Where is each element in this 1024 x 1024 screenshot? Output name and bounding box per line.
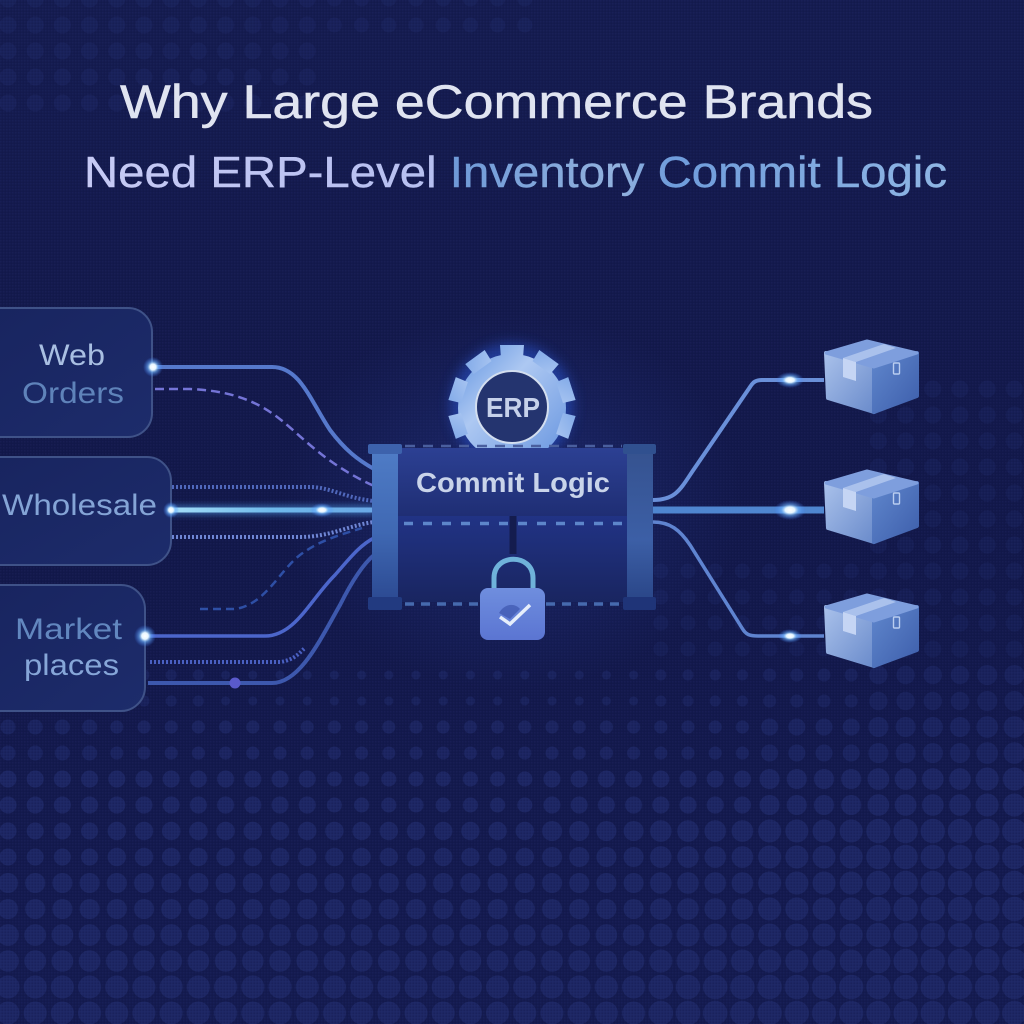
spark: wholesale — [163, 502, 179, 518]
panel: Marketplaces: Market — [15, 613, 123, 646]
line: faint dashed — [200, 528, 362, 609]
title line 1: Why Large eCommerce Brands — [120, 75, 873, 128]
icon: package bottom — [826, 595, 917, 666]
line: output middle — [653, 506, 824, 514]
line: marketplaces solid — [146, 538, 374, 636]
panel: Web Orders: Orders — [22, 377, 124, 410]
line: wholesale glow — [170, 505, 374, 515]
line: marketplaces lower — [148, 555, 374, 683]
panel: Web Orders — [0, 308, 152, 437]
incoming flow lines — [134, 357, 374, 688]
node: purple dot — [230, 678, 240, 688]
gear hub — [476, 371, 548, 443]
spark: output bottom — [778, 629, 802, 643]
icon: package top — [826, 341, 917, 412]
outgoing flow lines — [653, 372, 824, 643]
panel: commit logic gate — [368, 444, 656, 610]
lower dashed rail — [405, 602, 620, 606]
title line 2: Need ERP-Level Inventory Commit Logic — [84, 148, 947, 197]
spark: marketplaces — [134, 625, 156, 647]
line: marketplaces dotted — [150, 648, 305, 662]
icon: package middle — [826, 471, 917, 542]
top dashed rail — [405, 445, 622, 447]
line: wholesale dotted top — [172, 487, 374, 501]
line: output bottom — [653, 522, 824, 636]
right post — [623, 444, 656, 610]
panel: Marketplaces: places — [24, 649, 119, 682]
gear teeth and body — [448, 345, 576, 462]
panel: Wholesale — [0, 457, 171, 565]
spark: output top — [776, 372, 804, 388]
line: output top — [653, 380, 824, 500]
left post — [368, 444, 402, 610]
spark: output middle — [774, 500, 806, 520]
line: web orders solid — [153, 367, 374, 469]
spark: web orders — [143, 357, 163, 377]
spark: wholesale middle — [310, 503, 334, 517]
line: wholesale solid — [170, 508, 374, 512]
middle dashed rail — [404, 522, 625, 525]
icon: ERP gear: ERP — [486, 392, 540, 423]
panel: Wholesale: Wholesale — [2, 489, 157, 522]
gate body — [398, 516, 627, 602]
line: web orders dashed — [155, 389, 374, 486]
icon: padlock — [480, 559, 545, 640]
icon: ERP gear — [448, 343, 576, 467]
vertical connector — [510, 516, 516, 554]
title — [84, 75, 947, 197]
line: wholesale dotted bottom — [172, 522, 374, 537]
panel: Marketplaces — [0, 585, 145, 711]
banner: Commit Logic: Commit Logic — [416, 467, 610, 498]
banner: Commit Logic — [398, 448, 627, 516]
panel: Web Orders: Web — [39, 339, 105, 372]
